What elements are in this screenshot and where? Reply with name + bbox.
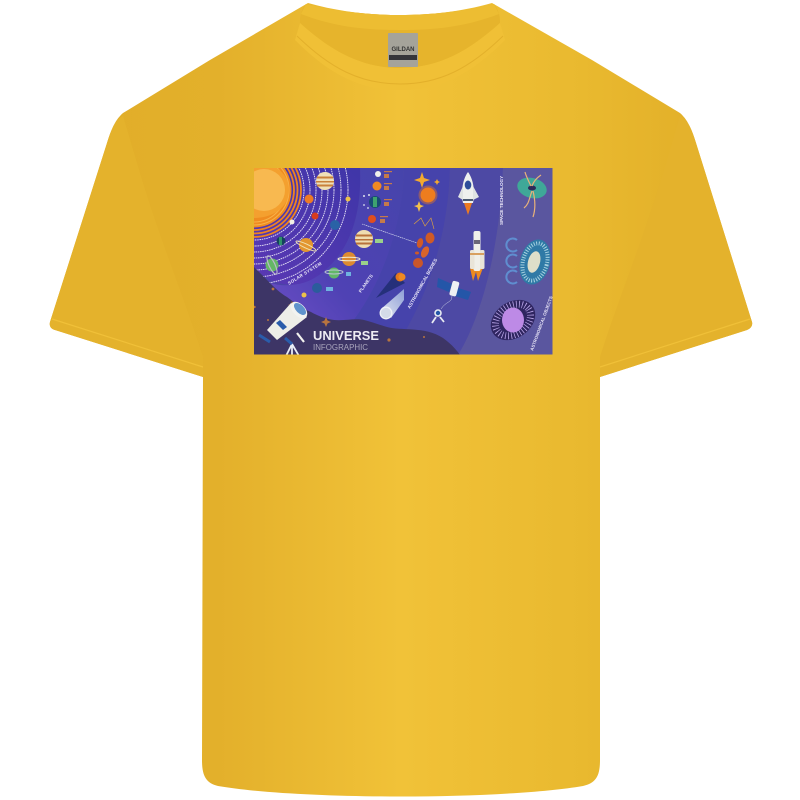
brand label xyxy=(388,33,418,67)
space technology xyxy=(432,172,484,323)
spiral galaxy xyxy=(515,236,555,288)
supernova xyxy=(517,172,547,218)
collar xyxy=(295,23,505,90)
title: UNIVERSE xyxy=(313,328,379,343)
tube xyxy=(267,303,307,340)
label: space technology: SPACE TECHNOLOGY xyxy=(499,176,504,225)
label: planets: PLANETS xyxy=(358,273,374,294)
band: astronomical bodies xyxy=(355,168,450,328)
label: solar system: SOLAR SYSTEM xyxy=(287,261,323,286)
rocket one xyxy=(458,172,479,215)
sun xyxy=(254,168,302,238)
band: astronomical objects xyxy=(459,279,488,354)
right sleeve shade xyxy=(600,116,752,377)
left sleeve shade xyxy=(50,116,203,377)
planets column xyxy=(302,171,417,298)
elliptical galaxy rings xyxy=(506,238,517,284)
telescope xyxy=(258,302,308,354)
astronomical objects xyxy=(490,172,551,340)
solar system planets xyxy=(265,172,350,275)
earth xyxy=(276,236,286,246)
band: space technology xyxy=(438,168,503,353)
jupiter xyxy=(316,172,334,190)
back neck band xyxy=(301,4,499,30)
label: astronomical bodies: ASTRONOMICAL BODIES xyxy=(407,258,438,309)
handle xyxy=(297,333,304,342)
collar rib line xyxy=(297,36,503,84)
rocket two xyxy=(470,231,484,281)
meteor xyxy=(380,289,404,319)
tripod xyxy=(286,344,299,356)
purple galaxy xyxy=(483,291,543,349)
label: astronomical objects: ASTRONOMICAL OBJECTS xyxy=(529,295,554,351)
mount xyxy=(259,335,292,344)
poster: universe infographic xyxy=(254,168,552,354)
satellite xyxy=(437,278,471,300)
neck interior xyxy=(300,4,500,68)
sleeve hems xyxy=(52,319,750,367)
subtitle: INFOGRAPHIC xyxy=(313,342,368,352)
asteroid belt pointer xyxy=(362,224,417,243)
band: solar system xyxy=(254,168,360,285)
band: planets xyxy=(270,168,404,320)
uranus xyxy=(265,255,279,275)
astronomical bodies xyxy=(398,172,440,280)
saturn xyxy=(295,238,317,252)
planet caption blocks xyxy=(380,171,392,223)
hill xyxy=(254,267,460,355)
hill stars xyxy=(253,288,425,342)
orbits xyxy=(254,168,348,283)
comet xyxy=(376,272,405,298)
brand label: GILDAN xyxy=(392,47,414,53)
poster background xyxy=(259,168,503,286)
astronaut xyxy=(432,296,452,323)
